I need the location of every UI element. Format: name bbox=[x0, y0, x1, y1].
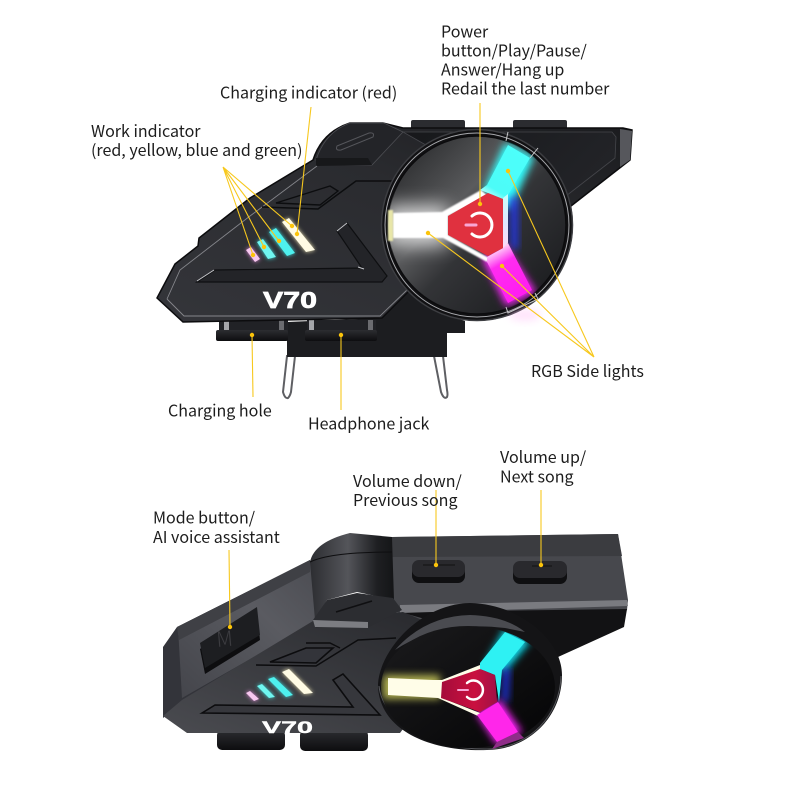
callout lines bbox=[223, 103, 594, 627]
logo V70: V70 bbox=[262, 718, 313, 737]
upper strip and window bbox=[262, 181, 395, 209]
label: work indicator: Work indicator bbox=[91, 118, 201, 142]
lower face bbox=[163, 612, 470, 733]
work indicator LEDs bbox=[246, 218, 315, 262]
cap lower step bbox=[316, 158, 372, 166]
chevron groove bbox=[197, 223, 387, 282]
body base silhouette bbox=[163, 560, 322, 718]
indicator LEDs bbox=[246, 669, 313, 701]
label: volume up: Volume up/ bbox=[500, 444, 586, 468]
infographic canvas bbox=[91, 26, 644, 751]
lines: RGB side lights bbox=[428, 171, 594, 357]
callout dots bbox=[228, 169, 543, 629]
line: headphone jack bbox=[340, 335, 342, 410]
label: RGB side lights: RGB Side lights bbox=[531, 358, 644, 382]
wing end chamfer bbox=[620, 129, 632, 167]
label: power: Power bbox=[441, 18, 488, 42]
top buttons bbox=[411, 120, 567, 129]
device: angled view bbox=[163, 533, 628, 751]
line: mode button bbox=[229, 550, 230, 627]
line: charging indicator bbox=[297, 107, 311, 234]
white light arm bbox=[388, 665, 482, 716]
power button hexagon bbox=[448, 193, 503, 256]
logo V70: V70 bbox=[263, 287, 317, 313]
disc bbox=[378, 603, 562, 750]
label: charging indicator: Charging indicator (red) bbox=[220, 80, 397, 104]
back ledge bbox=[400, 600, 628, 613]
mode button M bbox=[200, 607, 260, 674]
glow bbox=[383, 628, 530, 745]
power icon bbox=[458, 680, 483, 700]
label: charging hole: Charging hole bbox=[168, 398, 272, 422]
mode button M: M bbox=[215, 623, 234, 654]
main housing bbox=[157, 123, 632, 322]
body edge highlights bbox=[167, 166, 407, 316]
glow bbox=[385, 143, 536, 306]
back underside bbox=[400, 609, 627, 657]
label: work indicator: (red, yellow, blue and green) bbox=[91, 137, 302, 161]
upper lines bbox=[256, 638, 396, 666]
magenta light arm bbox=[487, 243, 532, 303]
magenta haze outside bbox=[509, 309, 541, 321]
lines: work indicator bbox=[223, 167, 292, 255]
chevron highlights bbox=[197, 223, 364, 281]
metal clips bbox=[283, 356, 448, 398]
lower face grooves bbox=[202, 674, 380, 715]
mounting plate bbox=[287, 292, 465, 357]
power icon bbox=[466, 213, 492, 237]
line: charging hole bbox=[252, 335, 253, 397]
back block upper strip bbox=[392, 534, 622, 557]
disc outer shell bbox=[378, 603, 562, 750]
top cap bbox=[316, 123, 403, 165]
device: top view bbox=[157, 120, 632, 398]
cyan light arm bbox=[480, 632, 525, 702]
line: volume up bbox=[540, 490, 542, 565]
line: volume down bbox=[435, 490, 437, 565]
label: headphone jack: Headphone jack bbox=[308, 410, 430, 434]
cap slit bbox=[336, 601, 372, 612]
charging hole port bbox=[216, 320, 288, 341]
disc top band bbox=[395, 615, 525, 650]
magenta rim accent bbox=[492, 732, 524, 749]
headphone jack port bbox=[305, 320, 377, 341]
hump bbox=[310, 533, 394, 620]
cap gray strip bbox=[313, 620, 368, 628]
right wing recess bbox=[403, 132, 616, 196]
line: power bbox=[479, 103, 481, 204]
cap bbox=[313, 593, 402, 628]
label: volume down: Previous song bbox=[353, 487, 458, 511]
cyan light arm bbox=[480, 145, 530, 206]
label: power: Redail the last number bbox=[441, 76, 610, 100]
label: power: button/Play/Pause/ bbox=[441, 38, 588, 62]
magenta light arm bbox=[477, 702, 518, 742]
rim accents bbox=[506, 132, 538, 313]
label: mode button: AI voice assistant bbox=[153, 524, 280, 548]
bottom feet bbox=[217, 730, 368, 751]
white light arm bbox=[393, 190, 489, 262]
volume up button bbox=[513, 561, 567, 584]
volume down button bbox=[412, 560, 465, 583]
label: mode button: Mode button/ bbox=[153, 504, 255, 528]
upper window bbox=[270, 648, 333, 663]
label: power: Answer/Hang up bbox=[441, 56, 564, 80]
power button hexagon bbox=[441, 669, 497, 712]
side wall bbox=[178, 560, 322, 698]
left rim light bbox=[388, 210, 393, 241]
hexagon right side light bbox=[503, 194, 508, 249]
disc rim line bbox=[379, 676, 561, 749]
back block bbox=[392, 534, 628, 657]
hump line bbox=[310, 552, 392, 562]
round button disc bbox=[381, 129, 573, 321]
label: volume up: Next song bbox=[500, 464, 574, 488]
disc face bbox=[381, 626, 555, 748]
upper wall band bbox=[177, 560, 310, 640]
label: volume down: Volume down/ bbox=[353, 468, 462, 492]
